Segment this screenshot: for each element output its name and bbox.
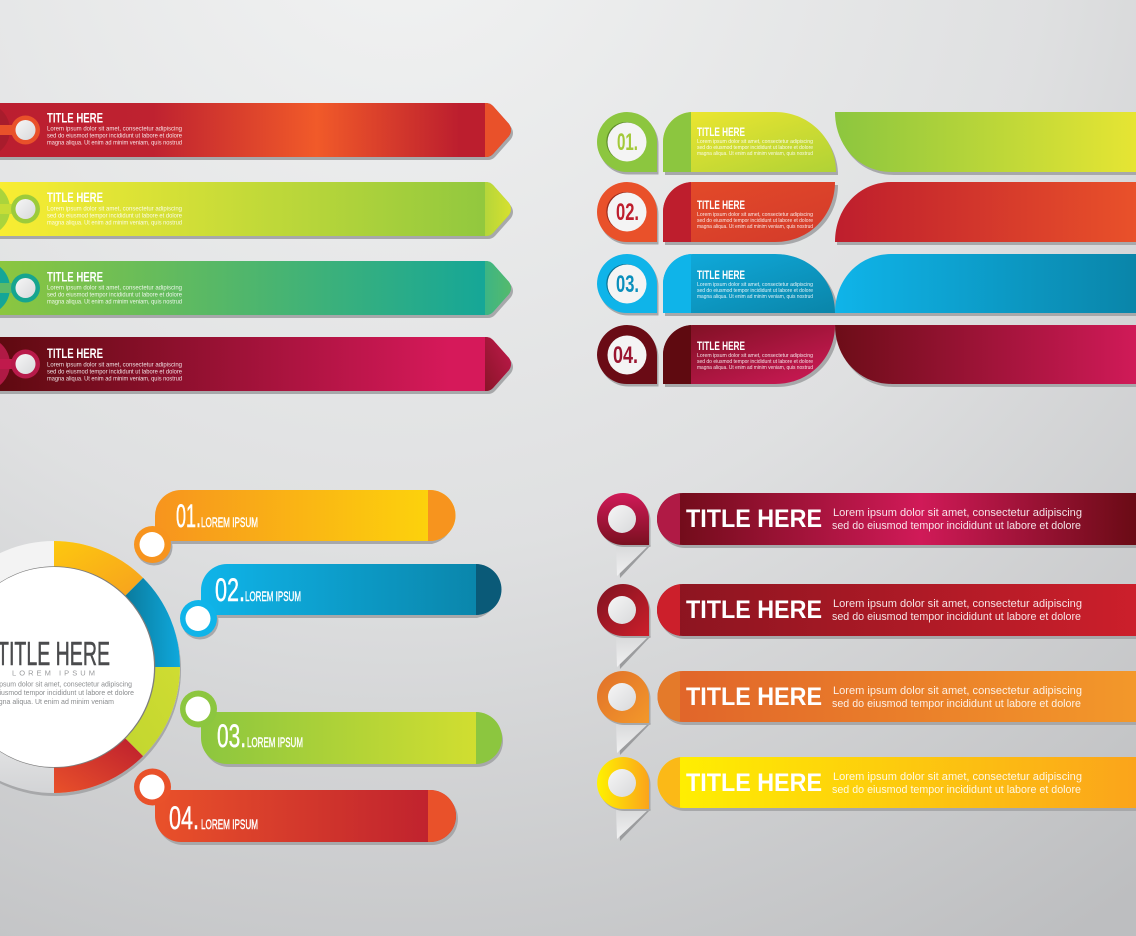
row 4 yellow: Lorem ipsum dolor sit amet, consectetur adipiscing: [833, 771, 1082, 783]
pill 02 blue: LOREM IPSUM: [245, 588, 301, 604]
row 4 yellow: TITLE HERE: [686, 769, 822, 797]
banner 2 lime: Lorem ipsum dolor sit amet, consectetur adipiscing: [47, 206, 182, 212]
pill 01 orange: LOREM IPSUM: [201, 514, 258, 530]
row 1 magenta: [597, 493, 1136, 578]
row 01 green: 01.: [617, 129, 638, 156]
panel: circular diagram bottom left: [0, 490, 503, 845]
banner 4 crimson: TITLE HERE: [47, 345, 103, 361]
row 02 red: sed do eiusmod tempor incididunt ut labore et dolore: [697, 218, 813, 224]
banner 2 lime: magna aliqua. Ut enim ad minim veniam, quis nostrud: [47, 220, 182, 226]
row 04 crimson: [597, 325, 1136, 387]
banner 3 teal: sed do eiusmod tempor incididunt ut labore et dolore: [47, 292, 182, 298]
banner 4 crimson: [0, 337, 513, 394]
panel: pin banners bottom right: [597, 493, 1136, 841]
pill 04 red: 04.: [169, 800, 199, 836]
banner 2 lime: sed do eiusmod tempor incididunt ut labore et dolore: [47, 212, 182, 220]
banner 1 red: sed do eiusmod tempor incididunt ut labore et dolore: [47, 132, 182, 140]
row 01 green: magna aliqua. Ut enim ad minim veniam, quis nostrud: [697, 151, 813, 157]
row 04 crimson: TITLE HERE: [697, 339, 745, 353]
row 01 green: sed do eiusmod tempor incididunt ut labore et dolore: [697, 145, 813, 151]
row 3 orange: sed do eiusmod tempor incididunt ut labore et dolore: [832, 698, 1081, 710]
banner 4 crimson: sed do eiusmod tempor incididunt ut labore et dolore: [47, 368, 182, 376]
pill 03 green: 03.: [217, 718, 246, 754]
row 02 red: TITLE HERE: [697, 198, 745, 212]
panel: arrow banners top left: [0, 103, 513, 394]
row 04 crimson: sed do eiusmod tempor incididunt ut labore et dolore: [697, 359, 813, 365]
banner 1 red: magna aliqua. Ut enim ad minim veniam, quis nostrud: [47, 140, 182, 146]
row 2 red: Lorem ipsum dolor sit amet, consectetur adipiscing: [833, 598, 1082, 610]
banner 1 red: [0, 103, 513, 160]
pill 03 green: LOREM IPSUM: [247, 734, 303, 750]
pill 01 orange: 01.: [176, 498, 201, 534]
pill 03 green: [180, 690, 503, 767]
banner 1 red: Lorem ipsum dolor sit amet, consectetur adipiscing: [47, 126, 182, 132]
pill 04 red: [134, 768, 458, 845]
row 2 red: sed do eiusmod tempor incididunt ut labore et dolore: [832, 611, 1081, 623]
banner 4 crimson: magna aliqua. Ut enim ad minim veniam, quis nostrud: [47, 376, 182, 382]
panel: numbered tabs top right: [597, 112, 1136, 387]
row 03 blue: Lorem ipsum dolor sit amet, consectetur adipiscing: [697, 282, 813, 288]
banner 4 crimson: Lorem ipsum dolor sit amet, consectetur adipiscing: [47, 362, 182, 368]
pill 02 blue: [180, 564, 502, 640]
pill 04 red: LOREM IPSUM: [201, 816, 258, 832]
center disc with title: TITLE HERE: [0, 635, 110, 672]
banner 3 teal: TITLE HERE: [47, 268, 103, 284]
row 1 magenta: sed do eiusmod tempor incididunt ut labore et dolore: [832, 520, 1081, 532]
row 04 crimson: Lorem ipsum dolor sit amet, consectetur adipiscing: [697, 353, 813, 359]
banner 3 teal: Lorem ipsum dolor sit amet, consectetur adipiscing: [47, 284, 182, 292]
row 03 blue: sed do eiusmod tempor incididunt ut labore et dolore: [697, 288, 813, 294]
row 3 orange: Lorem ipsum dolor sit amet, consectetur adipiscing: [833, 685, 1082, 697]
row 04 crimson: magna aliqua. Ut enim ad minim veniam, quis nostrud: [697, 365, 813, 371]
banner 2 lime: [0, 182, 513, 239]
row 02 red: [597, 182, 1136, 245]
row 01 green: [597, 112, 1136, 175]
row 01 green: Lorem ipsum dolor sit amet, consectetur adipiscing: [697, 139, 813, 145]
row 02 red: magna aliqua. Ut enim ad minim veniam, quis nostrud: [697, 224, 813, 230]
banner 2 lime: TITLE HERE: [47, 189, 103, 205]
row 4 yellow: sed do eiusmod tempor incididunt ut labore et dolore: [832, 784, 1081, 796]
banner 3 teal: magna aliqua. Ut enim ad minim veniam, quis nostrud: [47, 298, 182, 306]
pill 02 blue: 02.: [215, 572, 245, 608]
row 01 green: TITLE HERE: [697, 125, 745, 139]
row 03 blue: magna aliqua. Ut enim ad minim veniam, quis nostrud: [697, 294, 813, 300]
row 04 crimson: 04.: [613, 342, 638, 369]
row 3 orange: TITLE HERE: [686, 683, 822, 711]
row 1 magenta: Lorem ipsum dolor sit amet, consectetur adipiscing: [833, 507, 1082, 519]
row 3 orange: [597, 671, 1136, 755]
row 2 red: [597, 584, 1136, 669]
row 02 red: Lorem ipsum dolor sit amet, consectetur adipiscing: [697, 212, 813, 218]
row 4 yellow: [597, 757, 1136, 841]
pill 01 orange: [134, 490, 456, 566]
row 1 magenta: TITLE HERE: [686, 505, 822, 533]
row 2 red: TITLE HERE: [686, 596, 822, 624]
center disc with title: LOREM IPSUM: [12, 668, 95, 678]
center disc with title: [0, 566, 155, 768]
row 03 blue: [597, 254, 1136, 316]
banner 1 red: TITLE HERE: [47, 110, 103, 126]
row 03 blue: TITLE HERE: [697, 268, 745, 282]
banner 3 teal: [0, 261, 513, 318]
ring chart: [0, 541, 181, 796]
row 03 blue: 03.: [616, 271, 639, 298]
row 02 red: 02.: [616, 199, 639, 226]
